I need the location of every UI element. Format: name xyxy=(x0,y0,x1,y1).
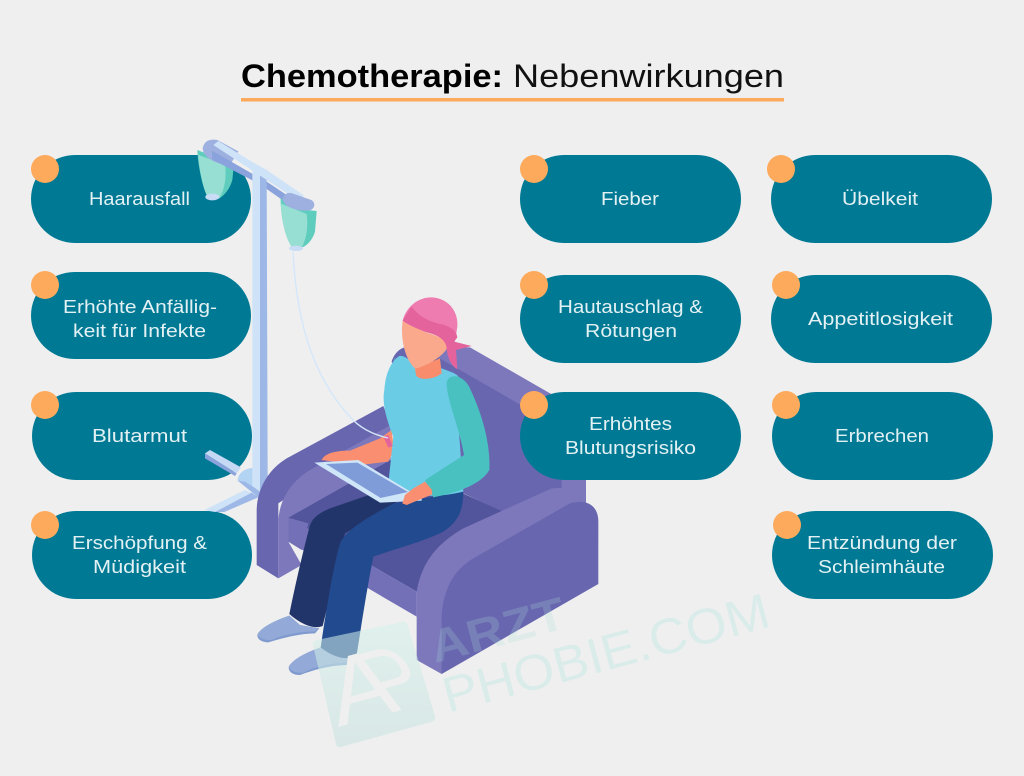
right armrest xyxy=(417,487,586,674)
watermark logo xyxy=(313,583,775,747)
hand xyxy=(402,482,432,505)
pill labels: Schleimhäute xyxy=(818,556,945,577)
left armrest xyxy=(257,406,392,578)
pill labels: Haarausfall xyxy=(89,188,190,209)
headscarf xyxy=(403,297,457,342)
pill labels: Appetitlosigkeit xyxy=(808,308,953,329)
pill labels: Erschöpfung & xyxy=(72,532,208,553)
shoes xyxy=(257,616,319,642)
pill labels: Erhöhte Anfällig- xyxy=(63,296,217,317)
pill labels: Blutarmut xyxy=(92,425,187,446)
pill labels: Hautauschlag & xyxy=(558,296,704,317)
blue leg xyxy=(321,492,463,658)
pill labels: Erhöhtes xyxy=(589,413,672,434)
title: Chemotherapie: xyxy=(241,58,503,94)
pill labels: Müdigkeit xyxy=(93,556,186,577)
sleeve xyxy=(425,376,489,497)
title: Nebenwirkungen xyxy=(513,58,784,94)
back sleeve xyxy=(387,357,395,387)
person xyxy=(257,297,489,675)
panel: middle column pills xyxy=(520,155,741,480)
watermark logo: A xyxy=(316,627,407,747)
pill labels: Entzündung der xyxy=(807,532,957,553)
panel: right column pills xyxy=(771,155,993,599)
seat xyxy=(288,460,507,592)
pill labels: Rötungen xyxy=(585,320,677,341)
chair xyxy=(257,347,598,674)
panel: left column pills xyxy=(31,155,252,599)
pill labels xyxy=(63,188,957,577)
bullet dots xyxy=(31,155,801,539)
neck xyxy=(415,358,442,379)
pill labels: Erbrechen xyxy=(835,425,929,446)
title xyxy=(241,58,784,102)
tablet xyxy=(314,460,422,503)
pill labels: Übelkeit xyxy=(842,188,918,209)
watermark logo: ARZT xyxy=(424,587,571,673)
IV patch xyxy=(383,435,393,448)
icon: IV stand xyxy=(197,140,317,512)
watermark logo: PHOBIE.COM xyxy=(436,583,775,724)
left arm xyxy=(322,430,394,465)
pill labels: Fieber xyxy=(601,188,659,209)
face xyxy=(402,321,447,369)
chair back xyxy=(392,347,586,503)
pill labels: Blutungsrisiko xyxy=(565,437,696,458)
torso xyxy=(384,356,463,496)
IV tube xyxy=(293,252,388,438)
dark leg xyxy=(289,490,397,627)
pill labels: keit für Infekte xyxy=(73,320,206,341)
watermark logo: P xyxy=(333,627,452,731)
